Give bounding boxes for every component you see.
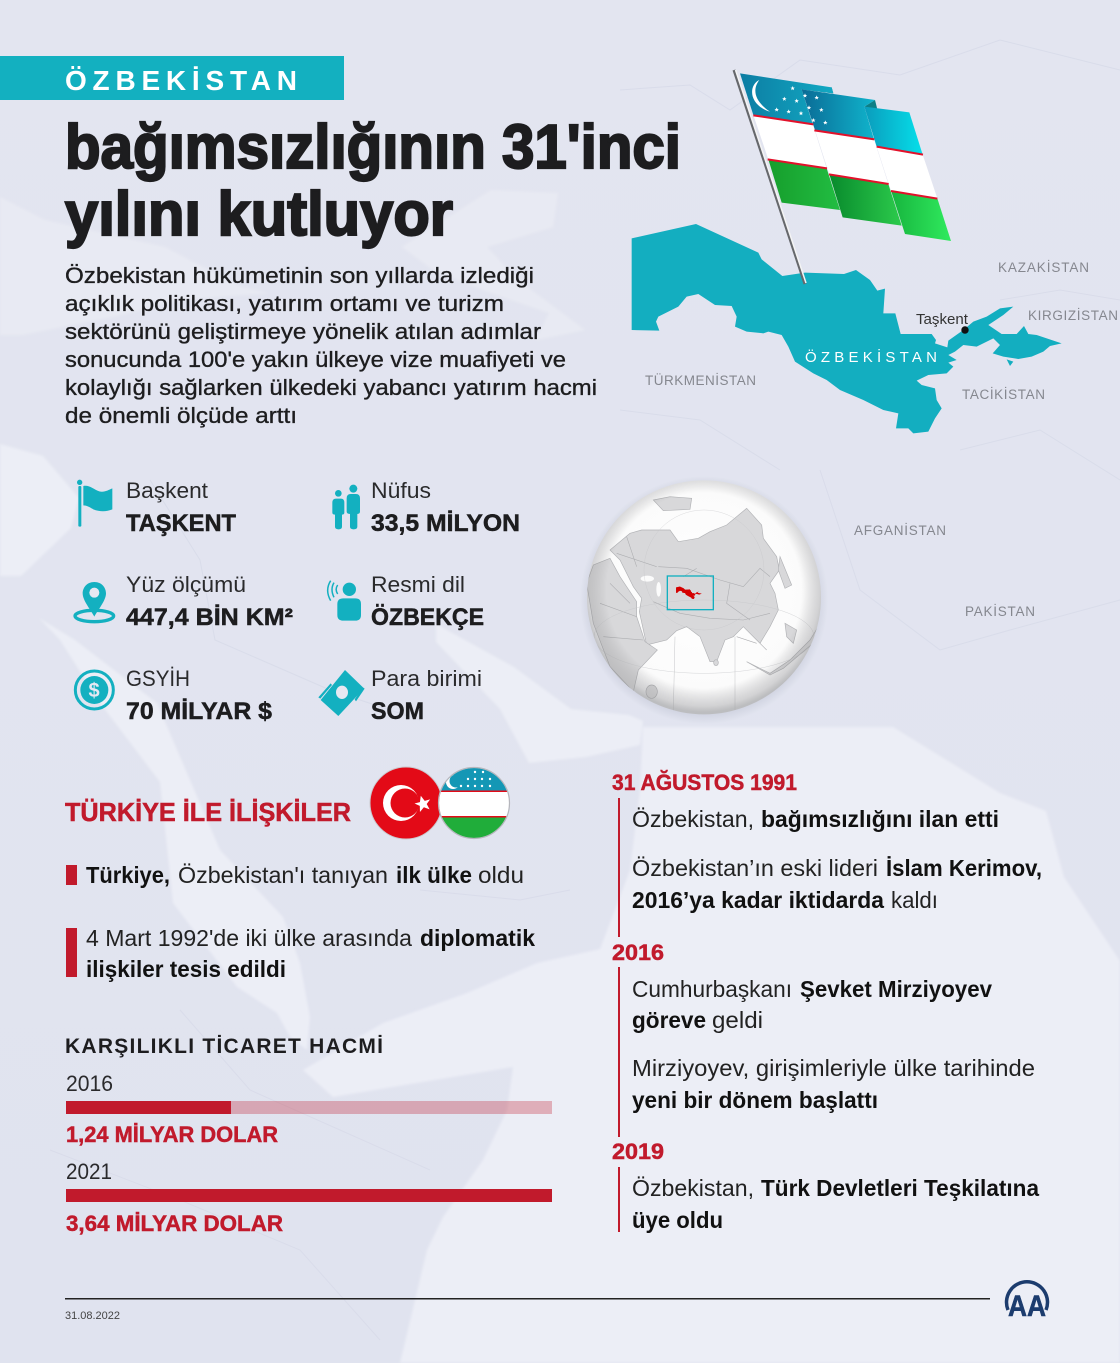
icon: Turkish flag circle [370, 767, 442, 839]
header banner [0, 56, 344, 100]
timeline: 2016: 2016 [612, 940, 664, 965]
timeline: 31 August 1991 [612, 770, 1042, 937]
logo: AA: AA [1008, 1290, 1046, 1323]
bar chart: trade volume: KARŞILIKLI TİCARET HACMİ [65, 1035, 383, 1058]
timeline: 2019: 2019 [612, 1139, 664, 1164]
timeline: 2016: yeni bir dönem başlattı [632, 1087, 878, 1113]
stat: GDP: 70 MİLYAR $ [126, 698, 272, 725]
map labels: AFGANİSTAN [854, 523, 946, 538]
intro text: kolaylığı sağlarken ülkedeki yabancı yatırım hacmi [65, 375, 597, 400]
title: bağımsızlığının 31'inci [65, 113, 681, 182]
globe locator [580, 476, 828, 724]
title: yılını kutluyor [65, 180, 453, 249]
timeline: 2019: Türk Devletleri Teşkilatına [761, 1175, 1039, 1201]
stat: population: Nüfus [371, 478, 431, 503]
stat: area [75, 572, 293, 631]
bullet: first country: ilk ülke [396, 862, 472, 888]
timeline: 31 August 1991: kaldı [891, 887, 938, 913]
timeline: 31 August 1991: Özbekistan, [632, 806, 754, 832]
bar chart: trade volume [65, 1035, 552, 1236]
stat: GDP: GSYİH [126, 666, 190, 691]
intro text [65, 263, 597, 428]
section heading: Turkey relations: TÜRKİYE İLE İLİŞKİLER [65, 797, 351, 827]
bar chart: trade volume: 1,24 MİLYAR DOLAR [66, 1122, 278, 1147]
bullet: diplomatic relations: 4 Mart 1992'de iki ülke arasında [86, 925, 412, 951]
timeline: 2016: göreve [632, 1007, 706, 1033]
map labels: KIRGIZİSTAN [1028, 308, 1118, 323]
timeline: 2019 [612, 1139, 1039, 1233]
stat: currency: Para birimi [371, 666, 482, 691]
bullet: diplomatic relations: diplomatik [420, 925, 535, 951]
timeline: 2019: üye oldu [632, 1207, 723, 1233]
title [65, 113, 681, 249]
intro text: sektörünü geliştirmeye yönelik atılan adımlar [65, 319, 541, 344]
intro text: de önemli ölçüde arttı [65, 403, 297, 428]
bar chart: trade volume: 3,64 MİLYAR DOLAR [66, 1211, 283, 1236]
flag pole [734, 70, 806, 284]
bullet: first country: Türkiye, [86, 862, 170, 888]
timeline: 2016: geldi [712, 1007, 763, 1033]
intro text: Özbekistan hükümetinin son yıllarda izlediği [65, 263, 534, 288]
bullet: diplomatic relations [66, 925, 535, 982]
bar chart: trade volume: 2016 [66, 1071, 113, 1096]
intro text: açıklık politikası, yatırım ortamı ve turizm [65, 291, 504, 316]
timeline: 31 August 1991: 31 AĞUSTOS 1991 [612, 770, 797, 795]
timeline: 2016: Şevket Mirziyoyev [800, 976, 992, 1002]
map labels: TACİKİSTAN [962, 387, 1045, 402]
stat: currency: SOM [371, 698, 424, 725]
stat: GDP [75, 666, 272, 725]
stat: capital [77, 478, 236, 537]
map labels [645, 260, 1118, 619]
intro text: sonucunda 100'e yakın ülkeye vize muafiyeti ve [65, 347, 566, 372]
stat: area: 447,4 BİN KM² [126, 604, 293, 631]
timeline: 2016: Cumhurbaşkanı [632, 976, 792, 1002]
timeline: 2016 [612, 940, 1035, 1137]
timeline: 31 August 1991: bağımsızlığını ilan etti [761, 806, 999, 832]
timeline: 2019: Özbekistan, [632, 1175, 754, 1201]
bullet: first country: Özbekistan'ı tanıyan [178, 862, 388, 888]
header banner: ÖZBEKİSTAN [65, 65, 297, 96]
stat: language [328, 572, 484, 631]
bullet: diplomatic relations: ilişkiler tesis edildi [86, 956, 286, 982]
timeline: 2016: Mirziyoyev, girişimleriyle ülke tarihinde [632, 1055, 1035, 1081]
map labels: KAZAKİSTAN [998, 260, 1089, 275]
timeline: 31 August 1991: İslam Kerimov, [886, 855, 1042, 881]
map of Uzbekistan [632, 224, 1062, 433]
map labels: TÜRKMENİSTAN [645, 373, 756, 388]
bullet: first country [66, 862, 524, 888]
stat: capital: Başkent [126, 478, 208, 503]
flag of Uzbekistan on pole [740, 73, 951, 241]
stat: language: ÖZBEKÇE [371, 604, 484, 631]
map labels: PAKİSTAN [965, 604, 1035, 619]
bar chart: trade volume: 2021 [66, 1159, 112, 1184]
map labels: Taşkent [916, 311, 969, 328]
stat: population: 33,5 MİLYON [371, 510, 520, 537]
timeline: 31 August 1991: Özbekistan’ın eski lideri [632, 855, 878, 881]
icon: Uzbek flag circle [438, 767, 510, 841]
stat: currency [318, 666, 482, 725]
map labels: ÖZBEKİSTAN [805, 348, 937, 366]
footer rule and date: 31.08.2022 [65, 1310, 120, 1322]
bullet: first country: oldu [478, 862, 524, 888]
stat: language: Resmi dil [371, 572, 465, 597]
timeline: 31 August 1991: 2016’ya kadar iktidarda [632, 887, 884, 913]
stat: GDP: $ [88, 680, 100, 702]
stat: capital: TAŞKENT [126, 510, 236, 537]
stat: population [332, 478, 520, 537]
stat: area: Yüz ölçümü [126, 572, 246, 597]
